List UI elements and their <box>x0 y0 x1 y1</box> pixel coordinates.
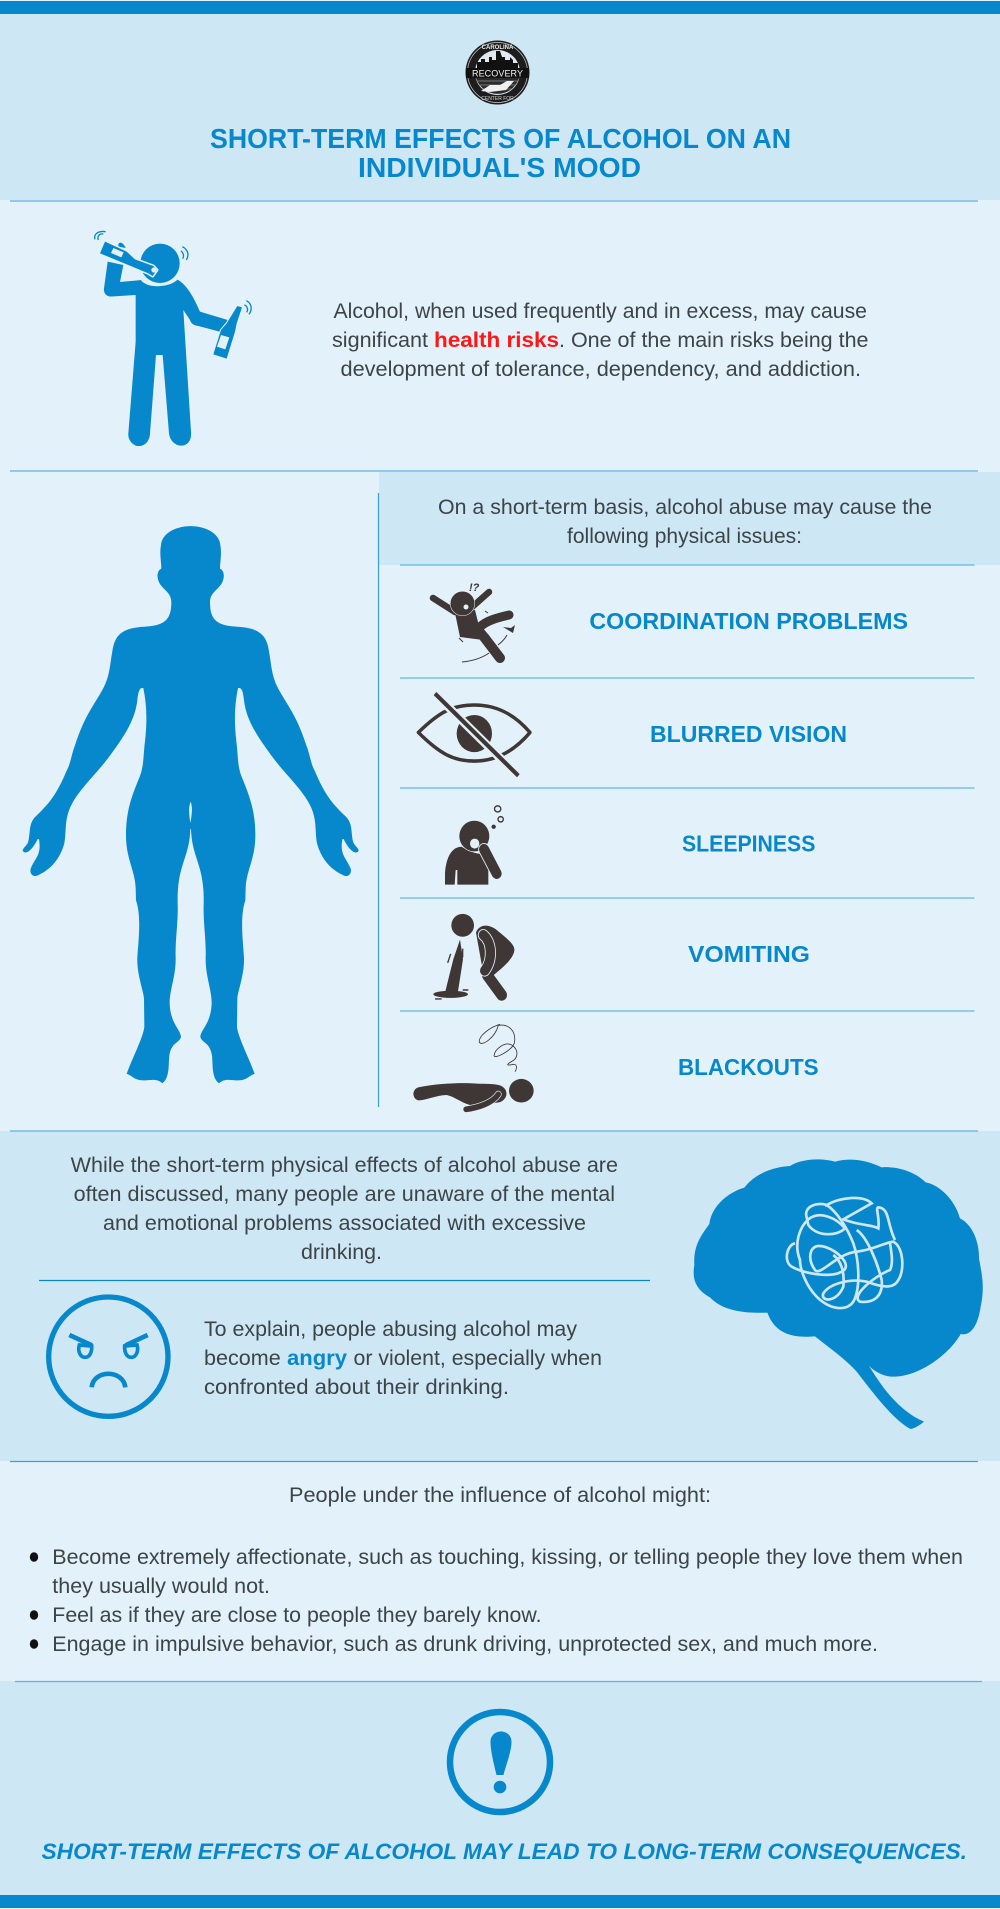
icon: human body silhouette <box>23 526 359 1083</box>
mental effects text <box>71 1154 618 1264</box>
logo: Carolina Recovery Center: CAROLINA <box>482 45 514 51</box>
angry text <box>204 1318 602 1399</box>
row: coordination problems <box>433 582 908 662</box>
physical issues intro text <box>438 496 932 548</box>
bullet list: Feel as if they are close to people they barely know. <box>52 1604 542 1627</box>
bottom bar <box>0 1895 1000 1908</box>
label: SLEEPINESS <box>682 831 815 857</box>
physical issues intro text: On a short-term basis, alcohol abuse may cause the <box>438 496 932 519</box>
logo: Carolina Recovery Center: RECOVERY <box>472 69 523 79</box>
icon: person slipping <box>433 582 515 662</box>
icon: sleepy person <box>445 806 503 885</box>
intro text: . One of the main risks being the <box>559 329 868 352</box>
mental effects text: drinking. <box>301 1241 382 1264</box>
intro text <box>332 300 868 381</box>
intro text: Alcohol, when used frequently and in excess, may cause <box>334 300 867 323</box>
logo: Carolina Recovery Center: CENTER FOR <box>481 96 514 102</box>
bullet list: Engage in impulsive behavior, such as drunk driving, unprotected sex, and much more. <box>52 1633 878 1656</box>
row: vomiting <box>433 914 810 999</box>
icon: brain with tangled lines <box>694 1159 983 1429</box>
icon: person vomiting <box>433 914 514 999</box>
icon: person drinking from bottle <box>95 231 251 446</box>
list heading: People under the influence of alcohol might: <box>289 1484 711 1507</box>
label: BLURRED VISION <box>650 721 847 747</box>
angry text: or violent, especially when <box>354 1347 602 1370</box>
angry text: To explain, people abusing alcohol may <box>204 1318 578 1341</box>
intro text: development of tolerance, dependency, and addiction. <box>340 358 861 381</box>
icon: person slipping: !? <box>469 582 480 594</box>
label: COORDINATION PROBLEMS <box>589 608 908 634</box>
title <box>210 123 791 183</box>
row: sleepiness <box>445 806 815 885</box>
label: VOMITING <box>688 941 810 967</box>
angry text: become <box>204 1347 281 1370</box>
mental effects text: often discussed, many people are unaware of the mental <box>74 1183 615 1206</box>
angry text: angry <box>287 1347 347 1370</box>
mental effects text: While the short-term physical effects of alcohol abuse are <box>71 1154 618 1177</box>
angry text: confronted about their drinking. <box>204 1376 509 1399</box>
panel: conclusion <box>0 1681 1000 1895</box>
icon: person passed out <box>413 1024 534 1109</box>
bullet list <box>30 1546 963 1656</box>
label: BLACKOUTS <box>678 1054 819 1080</box>
bullet list: Become extremely affectionate, such as touching, kissing, or telling people they love them when <box>52 1546 963 1569</box>
icon: exclamation mark in circle <box>450 1712 550 1812</box>
panel: mental and emotional <box>0 1131 1000 1461</box>
panel: under the influence <box>0 1461 1000 1681</box>
row: blackouts <box>413 1024 819 1109</box>
intro text: health risks <box>434 329 559 352</box>
title: SHORT-TERM EFFECTS OF ALCOHOL ON AN <box>210 123 791 154</box>
icon: angry face <box>49 1297 168 1416</box>
panel: physical issues <box>378 472 1000 1109</box>
physical issues intro text: following physical issues: <box>567 525 802 548</box>
row: blurred vision <box>418 693 847 776</box>
top bar <box>0 1 1000 14</box>
intro text: significant <box>332 329 428 352</box>
mental effects text: and emotional problems associated with excessive <box>103 1212 586 1235</box>
icon: crossed-out eye <box>418 693 530 776</box>
title: INDIVIDUAL'S MOOD <box>358 152 641 183</box>
logo: Carolina Recovery Center <box>466 40 530 104</box>
panel: header <box>0 14 1000 201</box>
panel: intro <box>10 231 978 471</box>
bullet list: they usually would not. <box>52 1575 270 1598</box>
closing statement: SHORT-TERM EFFECTS OF ALCOHOL MAY LEAD TO LONG-TERM CONSEQUENCES. <box>42 1839 967 1864</box>
